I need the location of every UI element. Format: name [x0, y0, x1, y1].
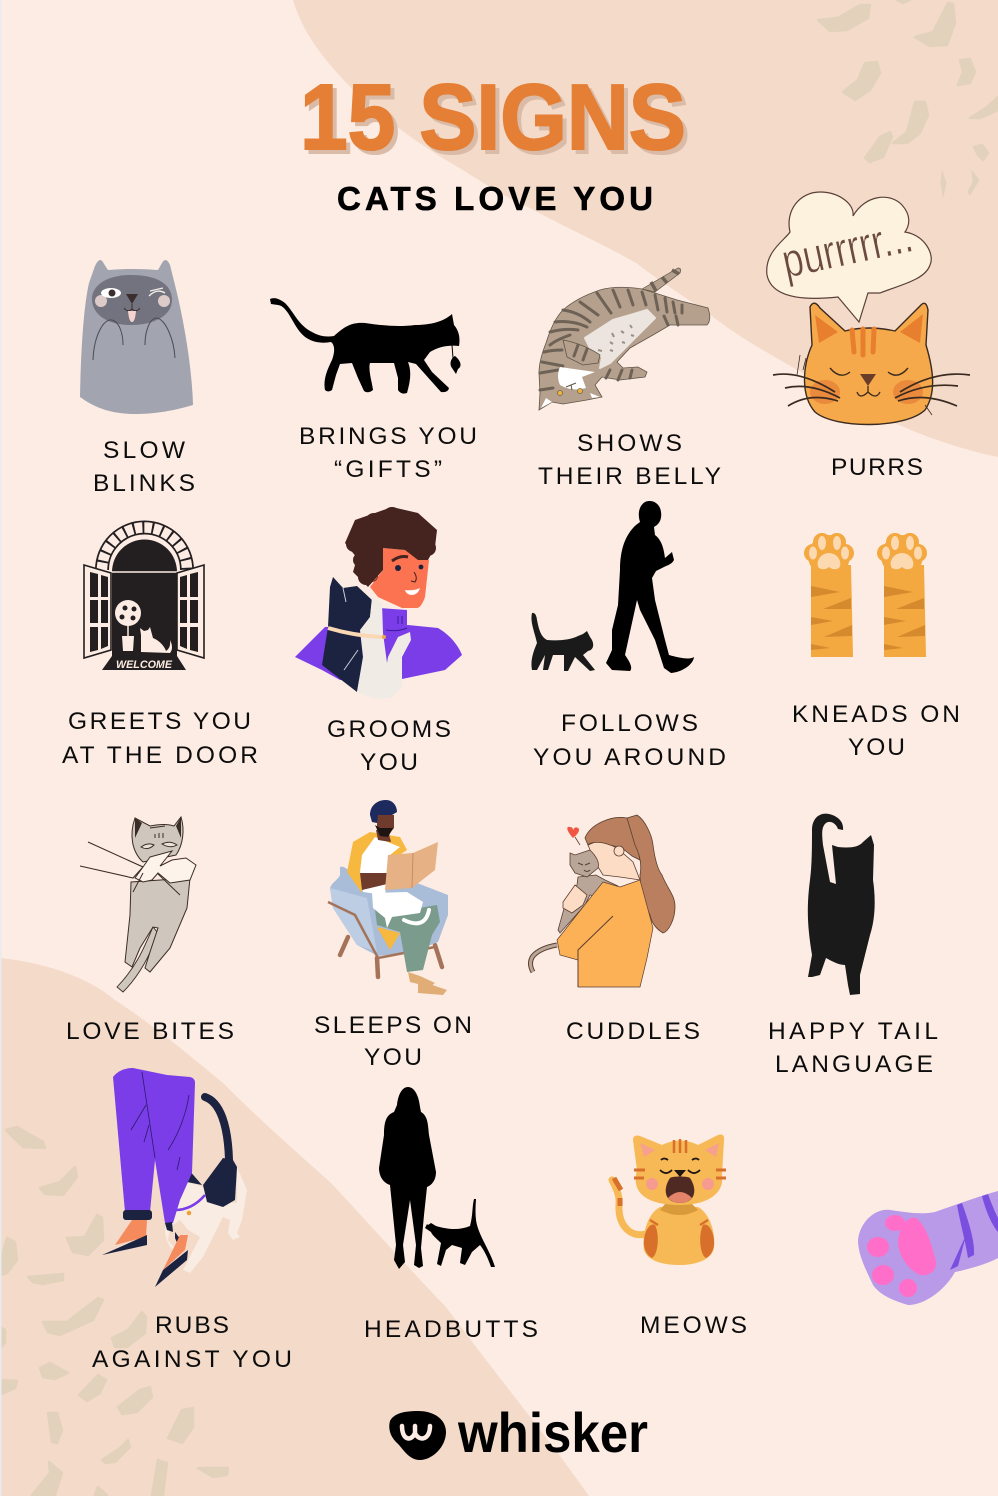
fur specks top right — [818, 0, 998, 197]
label: greets you at the door: AT THE DOOR — [62, 742, 258, 769]
label: rubs against you: AGAINST YOU — [92, 1346, 292, 1373]
bottom left background shape — [0, 958, 589, 1496]
label: headbutts: HEADBUTTS — [364, 1316, 538, 1343]
label: shows their belly: THEIR BELLY — [538, 463, 721, 490]
title: 15 SIGNS — [300, 65, 686, 169]
icon: window with welcome mat — [84, 528, 204, 671]
label: shows their belly — [538, 430, 721, 490]
icon: black cat with happy tail — [808, 814, 875, 995]
label: purrs: PURRS — [831, 454, 923, 481]
icon: window with welcome mat: WELCOME — [116, 659, 173, 671]
label: slow blinks: SLOW — [103, 437, 186, 464]
icon: man with cat grooming him — [295, 507, 462, 699]
icon: orange kneading paws — [804, 533, 927, 657]
icon: tabby cat showing belly — [539, 268, 710, 410]
top right background shape — [293, 0, 998, 457]
label: sleeps on you — [314, 1012, 472, 1071]
label: follows you around: FOLLOWS — [561, 710, 698, 737]
fur specks bottom left — [0, 1127, 228, 1495]
label: rubs against you — [92, 1312, 292, 1373]
label: grooms you: YOU — [360, 749, 418, 776]
icon: orange purring cat — [773, 303, 970, 425]
label: brings you gifts: “GIFTS” — [334, 456, 442, 483]
icon: woman silhouette with cat headbutting — [379, 1087, 495, 1269]
icon: cat giving love bites — [80, 817, 196, 992]
label: brings you gifts: BRINGS YOU — [299, 423, 477, 450]
label: grooms you — [327, 716, 451, 776]
label: kneads on you — [792, 701, 960, 761]
icon: orange meowing cat — [612, 1135, 726, 1265]
label: meows: MEOWS — [640, 1312, 747, 1339]
subtitle: CATS LOVE YOU — [337, 180, 653, 217]
icon: black cat with mouse — [270, 298, 461, 394]
label: follows you around — [533, 710, 726, 771]
icon: purr speech bubble: purrrrr... — [777, 209, 917, 289]
left edge line — [0, 0, 2, 1496]
label: kneads on you: KNEADS ON — [792, 701, 960, 728]
icon: purple paw — [858, 1191, 998, 1305]
icon: cat rubbing against legs — [102, 1068, 247, 1287]
label: cuddles: CUDDLES — [566, 1018, 700, 1045]
label: greets you at the door: GREETS YOU — [68, 708, 251, 735]
label: grooms you: GROOMS — [327, 716, 451, 743]
icon: man silhouette followed by cat — [531, 501, 694, 673]
label: greets you at the door — [62, 708, 258, 769]
icon: man reading with cat sleeping on lap — [328, 800, 448, 995]
label: follows you around: YOU AROUND — [533, 744, 726, 771]
label: sleeps on you: SLEEPS ON — [314, 1012, 472, 1039]
icon: woman cuddling cat — [530, 815, 675, 987]
label: happy tail language — [768, 1018, 938, 1078]
label: slow blinks: BLINKS — [93, 470, 195, 497]
label: happy tail language: LANGUAGE — [775, 1051, 933, 1078]
label: sleeps on you: YOU — [364, 1044, 422, 1071]
label: love bites: LOVE BITES — [66, 1018, 234, 1045]
logo: whisker — [389, 1401, 648, 1464]
icon: grey winking cat — [80, 260, 193, 414]
label: rubs against you: RUBS — [155, 1312, 229, 1339]
icon: purr speech bubble — [767, 192, 931, 322]
wordmark: whisker — [457, 1401, 648, 1464]
label: kneads on you: YOU — [848, 734, 905, 761]
logo mark — [389, 1411, 446, 1460]
label: shows their belly: SHOWS — [577, 430, 682, 457]
label: slow blinks — [93, 437, 195, 497]
label: happy tail language: HAPPY TAIL — [768, 1018, 938, 1045]
label: brings you gifts — [299, 423, 477, 483]
